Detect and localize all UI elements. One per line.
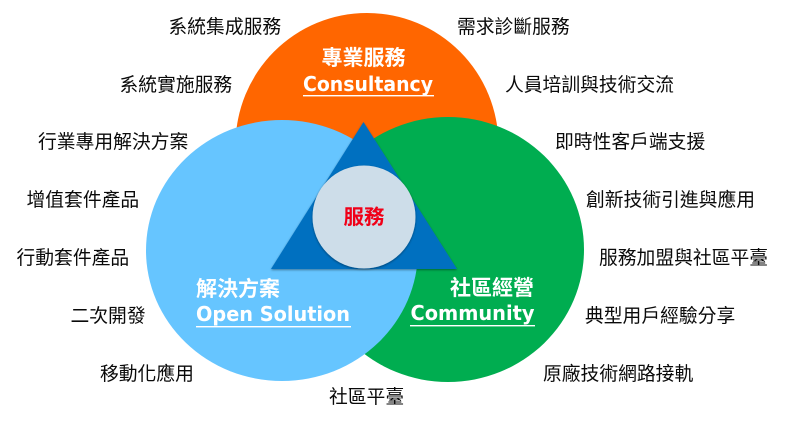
service labels: right side: 原廠技術網路接軌 (543, 362, 693, 384)
circle: consultancy (236, 13, 498, 277)
service labels: right side: 創新技術引進與應用 (586, 188, 755, 210)
heading: consultancy (303, 47, 434, 96)
service labels: left side: 二次開發 (70, 305, 146, 326)
heading: open solution: 解決方案 (196, 277, 280, 301)
service labels: left side (16, 16, 281, 384)
circle: open solution (146, 120, 418, 381)
service labels: left side: 行動套件產品 (16, 247, 129, 268)
service labels: left side: 增值套件產品 (26, 189, 139, 210)
service labels: left side: 系統實施服務 (120, 74, 232, 95)
service labels: left side: 移動化應用 (100, 362, 194, 384)
service labels: left side: 系統集成服務 (168, 16, 281, 37)
heading: consultancy: 專業服務 (322, 47, 406, 70)
heading: community: Community (410, 301, 534, 325)
service labels: right side: 需求診斷服務 (457, 16, 570, 37)
service labels: left side: 行業專用解決方案 (38, 131, 188, 152)
service labels: right side: 人員培訓與技術交流 (505, 74, 674, 95)
heading: community: 社區經營 (450, 277, 534, 300)
service labels: right side: 即時性客戶端支援 (555, 131, 705, 152)
heading: consultancy: Consultancy (303, 72, 433, 96)
circle: community (312, 117, 584, 382)
center label: 服務 (344, 206, 385, 229)
service label: bottom: 社區平臺 (329, 386, 404, 407)
center triangle (271, 122, 457, 269)
heading: open solution (196, 277, 351, 327)
heading: community (410, 277, 535, 326)
service labels: right side (457, 16, 768, 384)
center circle (312, 166, 416, 268)
service labels: right side: 典型用戶經驗分享 (585, 305, 735, 326)
service labels: right side: 服務加盟與社區平臺 (599, 247, 768, 268)
heading: open solution: Open Solution (196, 302, 350, 326)
